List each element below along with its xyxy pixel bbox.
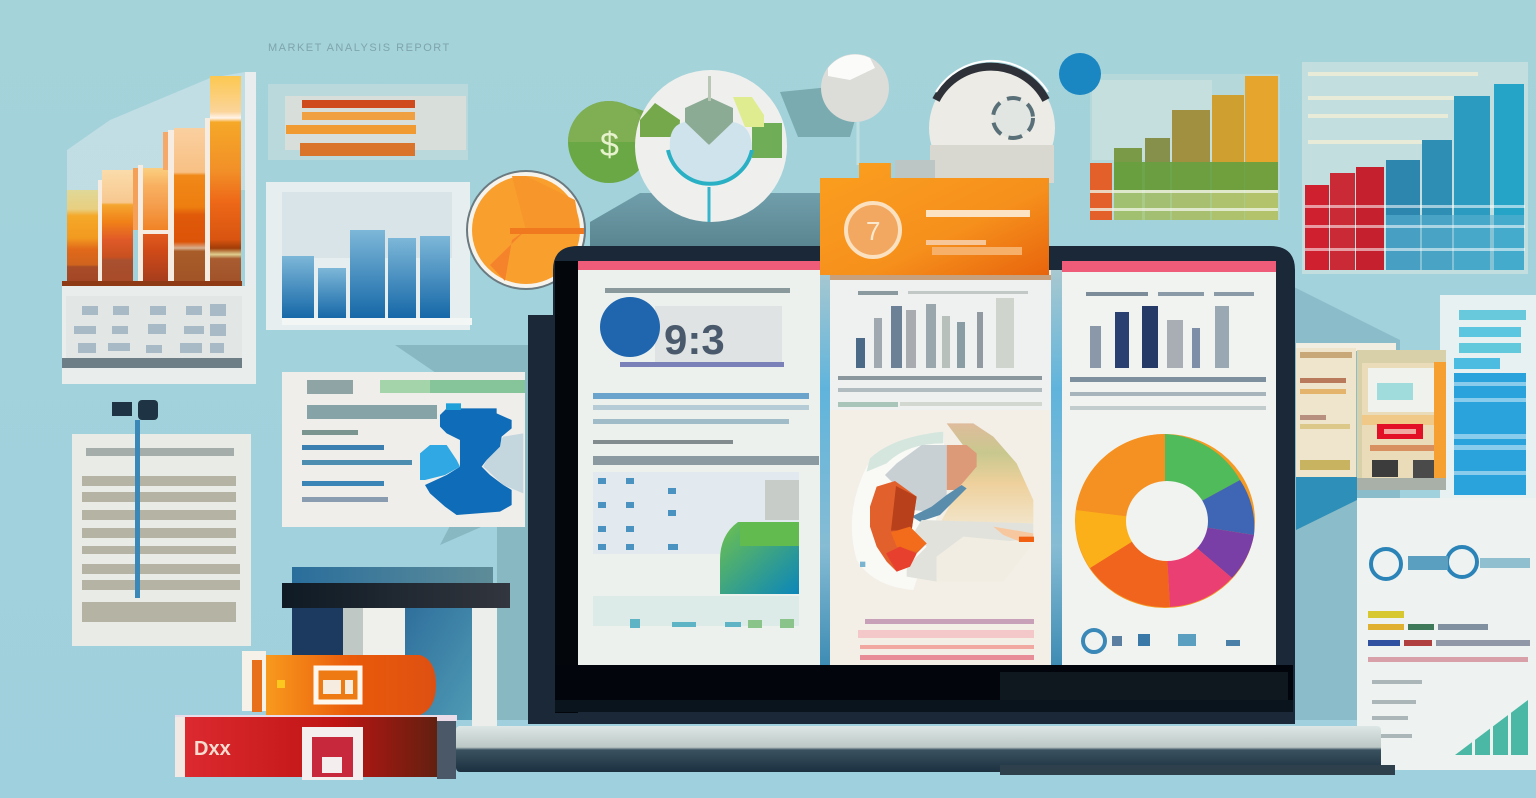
icon: green coin: $ — [600, 126, 619, 164]
laptop base — [456, 726, 1381, 772]
panel: report page bottom right — [1357, 498, 1536, 770]
screen: right column — [1062, 261, 1276, 665]
icon: blue pie — [420, 403, 523, 515]
metric card: 9:3 — [664, 316, 725, 363]
legend icons — [1083, 630, 1240, 652]
laptop bezel — [528, 246, 1295, 724]
faint title text: MARKET ANALYSIS REPORT — [268, 42, 451, 54]
orange folder tab — [820, 163, 1051, 280]
icon: blue dot — [1059, 53, 1101, 95]
panel: blue bar chart — [266, 182, 472, 330]
bars — [1090, 306, 1229, 368]
screen column gaps — [820, 270, 830, 665]
icon: radial gauge — [635, 70, 787, 222]
data table — [593, 472, 799, 554]
panel: red blue table chart — [1302, 62, 1528, 274]
icon: orange pie — [466, 170, 586, 290]
panel: pie chart report — [282, 372, 525, 527]
icon: green coin — [568, 101, 680, 183]
panel: orange bar chart — [62, 72, 256, 384]
panel: cream document and tablet — [1296, 343, 1446, 490]
shadow shapes behind laptop — [395, 87, 1400, 720]
donut chart — [1075, 434, 1255, 608]
icon: teal green block chart — [720, 522, 799, 594]
red book — [175, 715, 457, 780]
panel: document with pointer — [72, 400, 251, 646]
metric card — [600, 297, 784, 367]
bars — [856, 298, 1014, 368]
gauge chart — [852, 423, 1034, 590]
orange folder tab: 7 — [866, 216, 880, 246]
icon: dome gauge — [895, 61, 1055, 191]
panel: green orange bar chart — [1090, 74, 1280, 220]
book stack — [175, 567, 510, 780]
red book: Dxx — [194, 738, 231, 760]
icon: white ball — [821, 54, 889, 165]
panel: blue text page right — [1440, 295, 1536, 510]
bars — [67, 190, 98, 286]
screen: left column — [578, 261, 820, 665]
laptop — [456, 163, 1395, 775]
panel: orange stripes chart — [268, 84, 468, 160]
orange book — [242, 651, 436, 715]
screen: centre column — [830, 270, 1051, 665]
